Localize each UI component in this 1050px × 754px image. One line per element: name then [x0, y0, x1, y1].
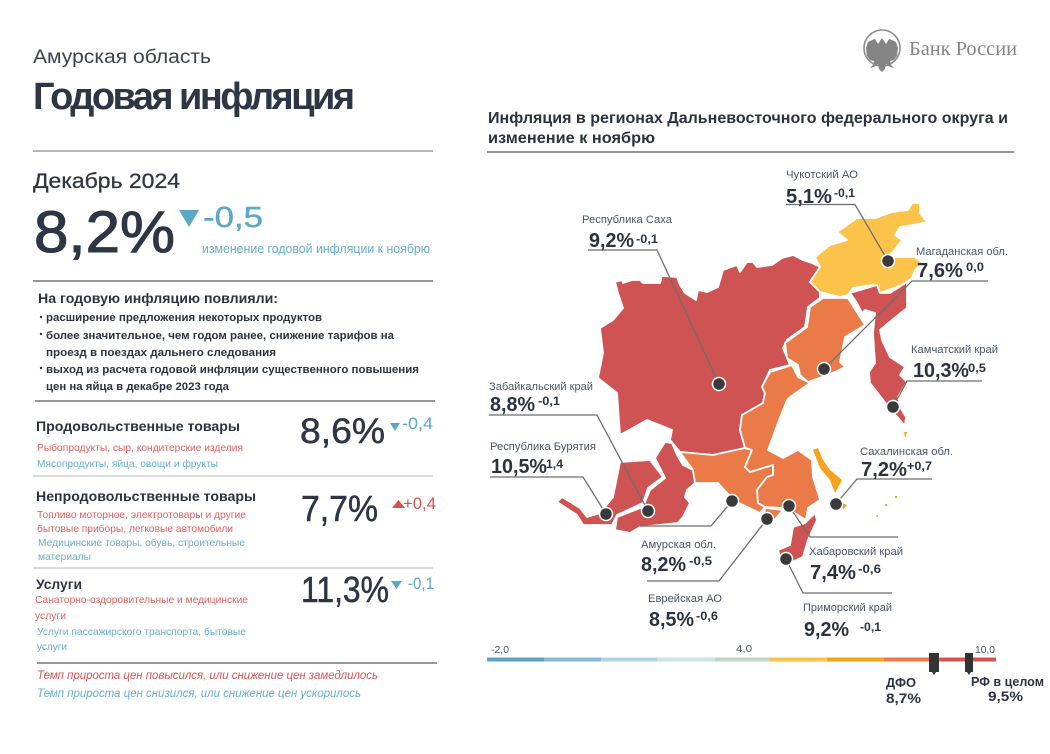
map: Far Eastern Federal District: [557, 203, 927, 563]
callout lines: [489, 204, 988, 593]
label: Magadan: Магаданская обл.: [916, 246, 1008, 258]
panel: non-food: Топливо моторное, электротовары и другие: [37, 509, 246, 521]
region: Magadan: [785, 298, 865, 382]
label: Saha: Республика Саха: [582, 214, 673, 226]
label: Saha: 9,2%: [589, 230, 634, 252]
panel: non-food: 7,7%: [301, 488, 378, 529]
label: Zabaikalsky: Забайкальский край: [489, 381, 593, 393]
label: Sakhalin: 7,2%: [861, 459, 907, 481]
panel: food: Продовольственные товары: [36, 418, 240, 434]
label: Khabarovsk: -0,6: [858, 562, 881, 576]
panel: services: [35, 569, 434, 653]
legend: colour notes: Темп прироста цен повысился, или снижение цен замедлилось: [37, 670, 378, 682]
panel: non-food: +0,4: [403, 494, 436, 513]
period heading: Декабрь 2024: [33, 170, 180, 193]
label: Sakhalin: Сахалинская обл.: [860, 446, 953, 458]
label: Magadan: 7,6%: [917, 260, 963, 282]
panel: non-food: Непродовольственные товары: [36, 488, 256, 504]
colour scale: -2,0: [491, 645, 509, 656]
marker: РФ в целом: РФ в целом: [971, 675, 1044, 689]
label: Primorye: 9,2%: [804, 619, 849, 641]
label: Jewish AO: [648, 593, 722, 631]
headline change: [179, 202, 430, 256]
label: Magadan: 0,0: [966, 260, 984, 274]
text block: factors: выход из расчета годовой инфляции существенного повышения: [46, 364, 419, 376]
label: Jewish AO: Еврейская АО: [648, 593, 722, 605]
map dots: [600, 254, 900, 566]
label: Saha: -0,1: [636, 232, 658, 246]
label: Sakhalin: [860, 446, 953, 481]
region: Saha: [598, 255, 820, 455]
region: Kamchatka: [850, 282, 907, 426]
label: Kamchatka: 10,3%: [913, 360, 969, 382]
label: Chukotka: [786, 169, 858, 208]
text block: factors: проезд в поездах дальнего следования: [46, 347, 276, 359]
label: Amur: [641, 539, 716, 576]
text block: factors: [38, 290, 419, 393]
marker: ДФО: ДФО: [886, 676, 916, 690]
panel: services: услуги: [37, 641, 67, 653]
label: Buryatia: 1,4: [546, 457, 563, 471]
region: Sakhalin: [813, 448, 842, 493]
region: Chukotka: [810, 203, 927, 297]
panel: food: 8,6%: [300, 412, 385, 451]
panel: services: Санаторно-оздоровительные и медицинские: [35, 594, 248, 606]
panel: non-food: бытовые приборы, легковые автомобили: [37, 523, 233, 535]
panel: food: Рыбопродукты, сыр, кондитерские изделия: [37, 442, 243, 454]
panel: services: услуги: [35, 610, 66, 622]
map heading: изменение к ноябрю: [488, 130, 655, 147]
region: Kuril islands: [842, 432, 907, 517]
map heading: Инфляция в регионах Дальневосточного федерального округа и: [488, 110, 1008, 127]
headline change: изменение годовой инфляции к ноябрю: [202, 241, 430, 256]
label: Zabaikalsky: 8,8%: [490, 394, 535, 416]
panel: non-food: материалы: [38, 551, 91, 563]
panel: food: -0,4: [402, 414, 433, 433]
marker: ДФО: 8,7%: [886, 690, 922, 706]
label: Zabaikalsky: -0,1: [538, 394, 560, 408]
text block: factors: цен на яйца в декабре 2023 года: [46, 381, 230, 393]
text block: factors: расширение предложения некоторых продуктов: [46, 312, 322, 324]
label: Buryatia: 10,5%: [491, 456, 547, 478]
label: Amur: -0,5: [689, 554, 712, 568]
headline value: 8,2%: [34, 200, 175, 265]
label: Jewish AO: -0,6: [696, 609, 718, 623]
label: Primorye: Приморский край: [803, 602, 892, 614]
panel: services: 11,3%: [301, 569, 389, 610]
legend: colour notes: Темп прироста цен снизился, или снижение цен ускорилось: [37, 688, 361, 700]
region: Jewish AO: [764, 508, 783, 523]
panel: non-food: [36, 488, 436, 563]
label: Amur: Амурская обл.: [641, 539, 716, 551]
label: Chukotka: -0,1: [834, 186, 855, 200]
label: Kamchatka: [911, 344, 998, 382]
region: Amur: [680, 448, 773, 513]
marker: РФ в целом: 9,5%: [988, 688, 1024, 704]
region: Khabarovsk: [740, 365, 820, 520]
label: Jewish AO: 8,5%: [649, 609, 694, 631]
label: Chukotka: Чукотский АО: [786, 169, 858, 181]
subtitle: region: Амурская область: [33, 47, 211, 68]
colour scale: 10,0: [975, 645, 995, 656]
region: Zabaikalsky: [615, 442, 695, 533]
logo: Bank of Russia: [864, 30, 1017, 72]
panel: food: [36, 412, 433, 470]
panel: food: Мясопродукты, яйца, овощи и фрукты: [37, 458, 218, 470]
region: Primorye: [778, 513, 817, 563]
label: Sakhalin: +0,7: [907, 459, 932, 473]
label: Primorye: -0,1: [860, 620, 881, 634]
label: Buryatia: [490, 441, 596, 478]
legend: colour notes: [37, 670, 378, 700]
panel: services: -0,1: [408, 574, 434, 593]
title: Годовая инфляция: [33, 76, 355, 118]
text block: factors: На годовую инфляцию повлияли:: [38, 290, 278, 306]
text block: factors: более значительное, чем годом ранее, снижение тарифов на: [46, 330, 395, 342]
label: Amur: 8,2%: [641, 554, 686, 576]
colour scale: [487, 644, 996, 662]
panel: services: Услуги: [36, 576, 82, 592]
label: Kamchatka: 0,5: [968, 361, 986, 375]
panel: non-food: Медицинские товары, обувь, строительные: [38, 537, 245, 549]
colour scale: 4,0: [736, 644, 752, 655]
panel: services: Услуги пассажирского транспорта, бытовые: [37, 626, 246, 638]
marker: РФ в целом: [965, 653, 1044, 704]
label: Saha: [582, 214, 673, 252]
label: Khabarovsk: Хабаровский край: [809, 546, 903, 558]
logo: Bank of Russia: Банк России: [909, 38, 1017, 60]
region: Buryatia: [557, 460, 663, 525]
label: Magadan: [916, 246, 1008, 282]
label: Chukotka: 5,1%: [786, 186, 832, 208]
label: Primorye: [803, 602, 892, 641]
label: Kamchatka: Камчатский край: [911, 344, 998, 356]
label: Khabarovsk: 7,4%: [810, 562, 856, 584]
marker: ДФО: [886, 653, 939, 706]
label: Buryatia: Республика Бурятия: [490, 441, 596, 453]
label: Khabarovsk: [809, 546, 903, 584]
headline change: -0,5: [203, 202, 263, 234]
label: Zabaikalsky: [489, 381, 593, 416]
